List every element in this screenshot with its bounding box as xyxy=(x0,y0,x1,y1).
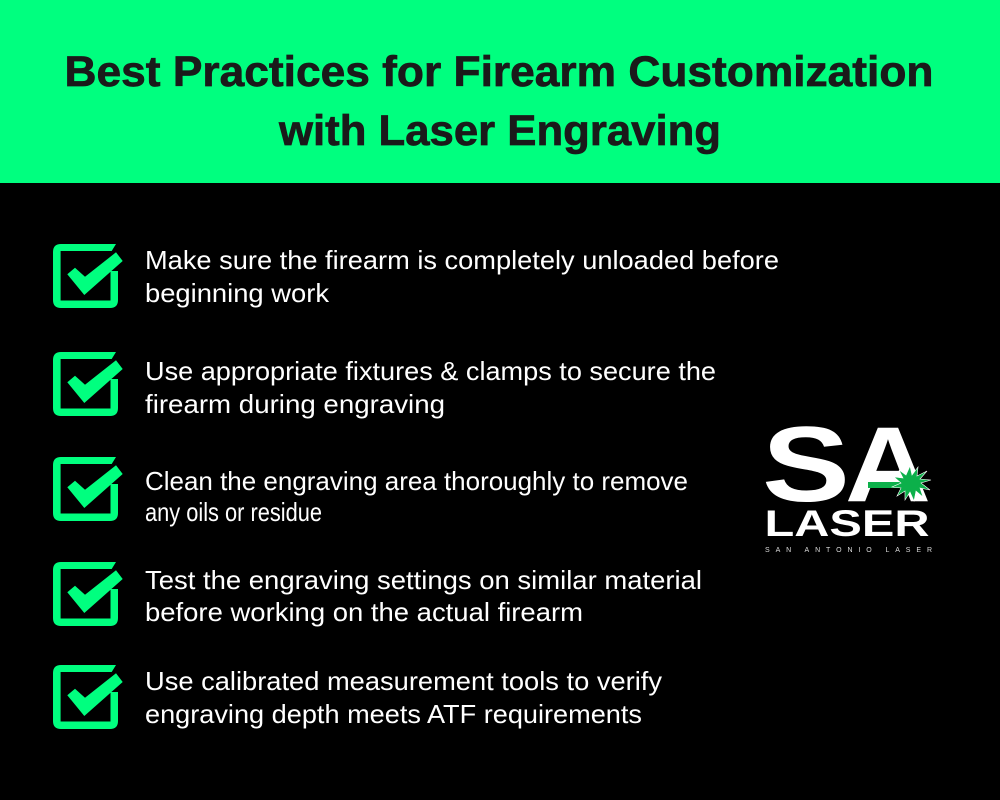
text: item 1: beginning work xyxy=(145,278,330,308)
icon: checkbox 5 xyxy=(53,665,123,729)
text: item 2: firearm during engraving xyxy=(145,389,445,419)
text: item 4: before working on the actual firearm xyxy=(145,597,583,627)
title xyxy=(64,48,933,155)
logo letters SA: A xyxy=(845,404,931,524)
logo letters SA: S xyxy=(762,404,850,524)
icon: checkbox 3 xyxy=(53,457,123,521)
checklist item 4 xyxy=(53,562,702,627)
logo: SA Laser xyxy=(762,404,932,554)
icon: checkbox 1 xyxy=(53,244,123,308)
text: item 3: Clean the engraving area thoroughly to remove xyxy=(145,466,688,496)
checklist item 1 xyxy=(53,244,779,308)
text: item 3 xyxy=(145,466,688,527)
title: Best Practices for Firearm Customization xyxy=(64,48,933,96)
checklist item 3 xyxy=(53,457,688,527)
text: item 3: any oils or residue xyxy=(145,497,322,527)
icon: checkbox 4 xyxy=(53,562,123,626)
laser beam xyxy=(868,482,906,488)
icon: checkbox 2 xyxy=(53,352,123,416)
icon: laser starburst xyxy=(892,466,931,501)
checklist item 2 xyxy=(53,352,716,419)
text: item 1 xyxy=(145,245,779,308)
logo word LASER: LASER xyxy=(764,503,930,544)
text: item 5: Use calibrated measurement tools to verify xyxy=(145,666,662,696)
text: item 2: Use appropriate fixtures & clamps to secure the xyxy=(145,356,716,386)
text: item 4: Test the engraving settings on similar material xyxy=(145,565,702,595)
title: with Laser Engraving xyxy=(278,107,721,155)
logo letters SA xyxy=(762,404,931,524)
text: item 5 xyxy=(145,666,662,729)
checklist item 5 xyxy=(53,665,662,729)
text: item 4 xyxy=(145,565,702,627)
header band xyxy=(0,0,1000,183)
text: item 1: Make sure the firearm is completely unloaded before xyxy=(145,245,779,275)
text: item 2 xyxy=(145,356,716,419)
text: item 5: engraving depth meets ATF requirements xyxy=(145,699,642,729)
logo tagline: SAN ANTONIO LASER xyxy=(765,547,932,554)
